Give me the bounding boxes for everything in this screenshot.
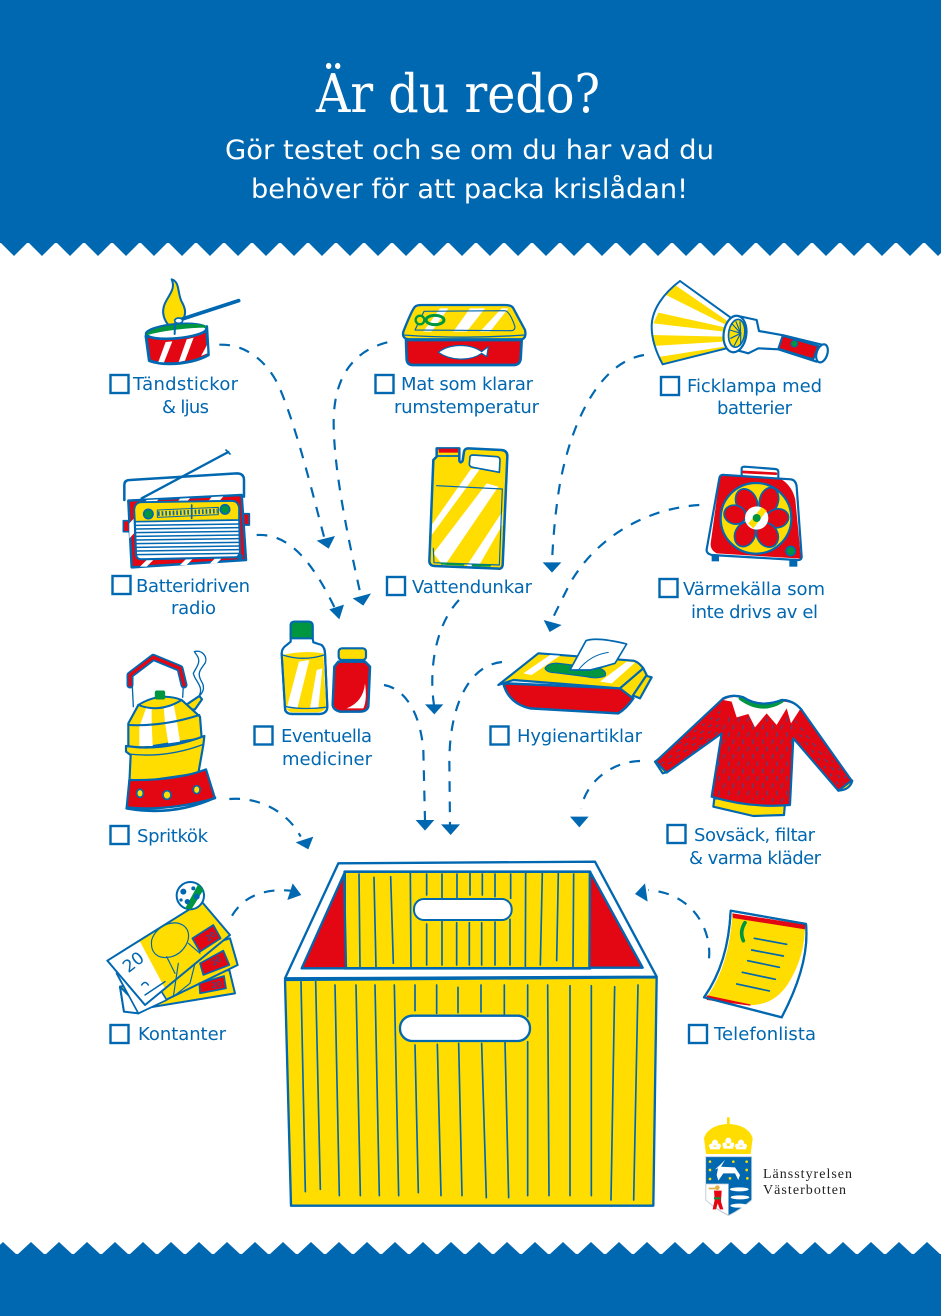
item: medicines: [254, 622, 373, 770]
icon: banknotes and card: [107, 882, 238, 1013]
arrows: [219, 342, 709, 958]
label: Batteridriven: [136, 576, 250, 597]
arrow: radio to pile: [257, 535, 344, 619]
item: food: [376, 305, 540, 418]
footer band: [0, 1242, 941, 1316]
arrow: canister to pile: [425, 600, 459, 714]
label: rumstemperatur: [394, 397, 540, 418]
item: heater: [660, 467, 825, 623]
box front: [285, 977, 657, 1206]
checkbox: [110, 1025, 128, 1043]
icon: wet wipes pack: [498, 639, 652, 713]
subtitle: [225, 135, 714, 205]
icon: phone list: [704, 911, 806, 1017]
box rim: [285, 862, 657, 978]
arrow: stove to box: [229, 799, 313, 849]
checkbox: [376, 375, 394, 393]
front handle: [400, 1016, 530, 1041]
arrow: sweater to box: [570, 761, 640, 827]
icon: heater: [707, 467, 802, 567]
checkbox: [110, 826, 128, 844]
box front lines: [301, 982, 638, 1200]
checkbox: [387, 577, 405, 595]
icon: banknotes and card: 20: [204, 930, 218, 943]
arrow: flashlight to pile: [543, 355, 644, 573]
label: Sovsäck, filtar: [694, 825, 816, 846]
red inner side left: [302, 874, 346, 968]
arrow: cash to box: [232, 883, 301, 916]
icon: banknotes and card: 20: [119, 948, 148, 977]
label: Värmekälla som: [683, 579, 825, 600]
icon: medicine bottle and jar: [282, 622, 370, 714]
checkbox: [110, 375, 128, 393]
label: Ficklampa med: [687, 376, 822, 397]
checkbox: [112, 576, 130, 594]
item: phone list: [689, 911, 816, 1045]
label: Mat som klarar: [401, 374, 534, 395]
checkbox: [254, 726, 272, 744]
item: water canister: [387, 448, 533, 598]
logo text: Västerbotten: [763, 1183, 846, 1198]
checkbox: [660, 579, 678, 597]
item: matches and candle: [110, 279, 239, 418]
label: Eventuella: [281, 726, 372, 747]
label: Vattendunkar: [412, 577, 533, 598]
item: flashlight: [650, 281, 830, 419]
icon: candle: [146, 279, 239, 364]
checkbox: [689, 1025, 707, 1043]
checkbox: [668, 825, 686, 843]
checkbox: [661, 377, 679, 395]
red inner side right: [589, 872, 643, 968]
arrow: wipes to box: [441, 662, 502, 835]
checkbox: [490, 726, 508, 744]
label: Telefonlista: [713, 1024, 816, 1045]
arrow: heater to pile: [544, 505, 699, 632]
logo text: Länsstyrelsen: [763, 1167, 852, 1182]
label: Hygienartiklar: [517, 726, 643, 747]
icon: banknotes and card: 20: [211, 980, 222, 990]
item: cash: [107, 882, 238, 1045]
arrow: medicines to box: [384, 685, 434, 831]
item: spirit stove: [110, 651, 215, 847]
icon: banknotes and card: 20: [210, 955, 223, 968]
label: mediciner: [282, 749, 373, 770]
label: radio: [171, 598, 216, 619]
label: inte drivs av el: [691, 602, 818, 623]
back wall lines: [359, 873, 574, 968]
arrow: tin to pile: [334, 342, 387, 606]
label: & ljus: [162, 397, 209, 418]
icon: tin can: [403, 305, 525, 365]
header band: [0, 0, 941, 256]
label: Kontanter: [138, 1024, 227, 1045]
subtitle: behöver för att packa krislådan!: [251, 174, 688, 205]
title: Är du redo?: [315, 64, 600, 125]
label: & varma kläder: [689, 848, 822, 869]
icon: radio: [123, 450, 249, 567]
crisis box: [285, 862, 657, 1206]
back handle: [414, 899, 512, 920]
arrow: phone list to box: [635, 883, 709, 958]
subtitle: Gör testet och se om du har vad du: [225, 135, 714, 166]
item: hygiene: [490, 639, 652, 747]
label: batterier: [717, 398, 793, 419]
coat of arms: [704, 1117, 753, 1216]
icon: kettle on stove: [126, 651, 215, 811]
item: warm clothes: [655, 696, 852, 869]
icon: sweater: [655, 696, 852, 816]
item: radio: [112, 450, 250, 619]
icon: water canister: [429, 448, 507, 569]
box back wall: [345, 872, 590, 968]
label: Tändstickor: [132, 374, 239, 395]
icon: flashlight: [650, 281, 830, 366]
arrow: candle to pile: [219, 345, 335, 549]
label: Spritkök: [137, 826, 209, 847]
logo: Länsstyrelsen Västerbotten: [704, 1117, 852, 1216]
